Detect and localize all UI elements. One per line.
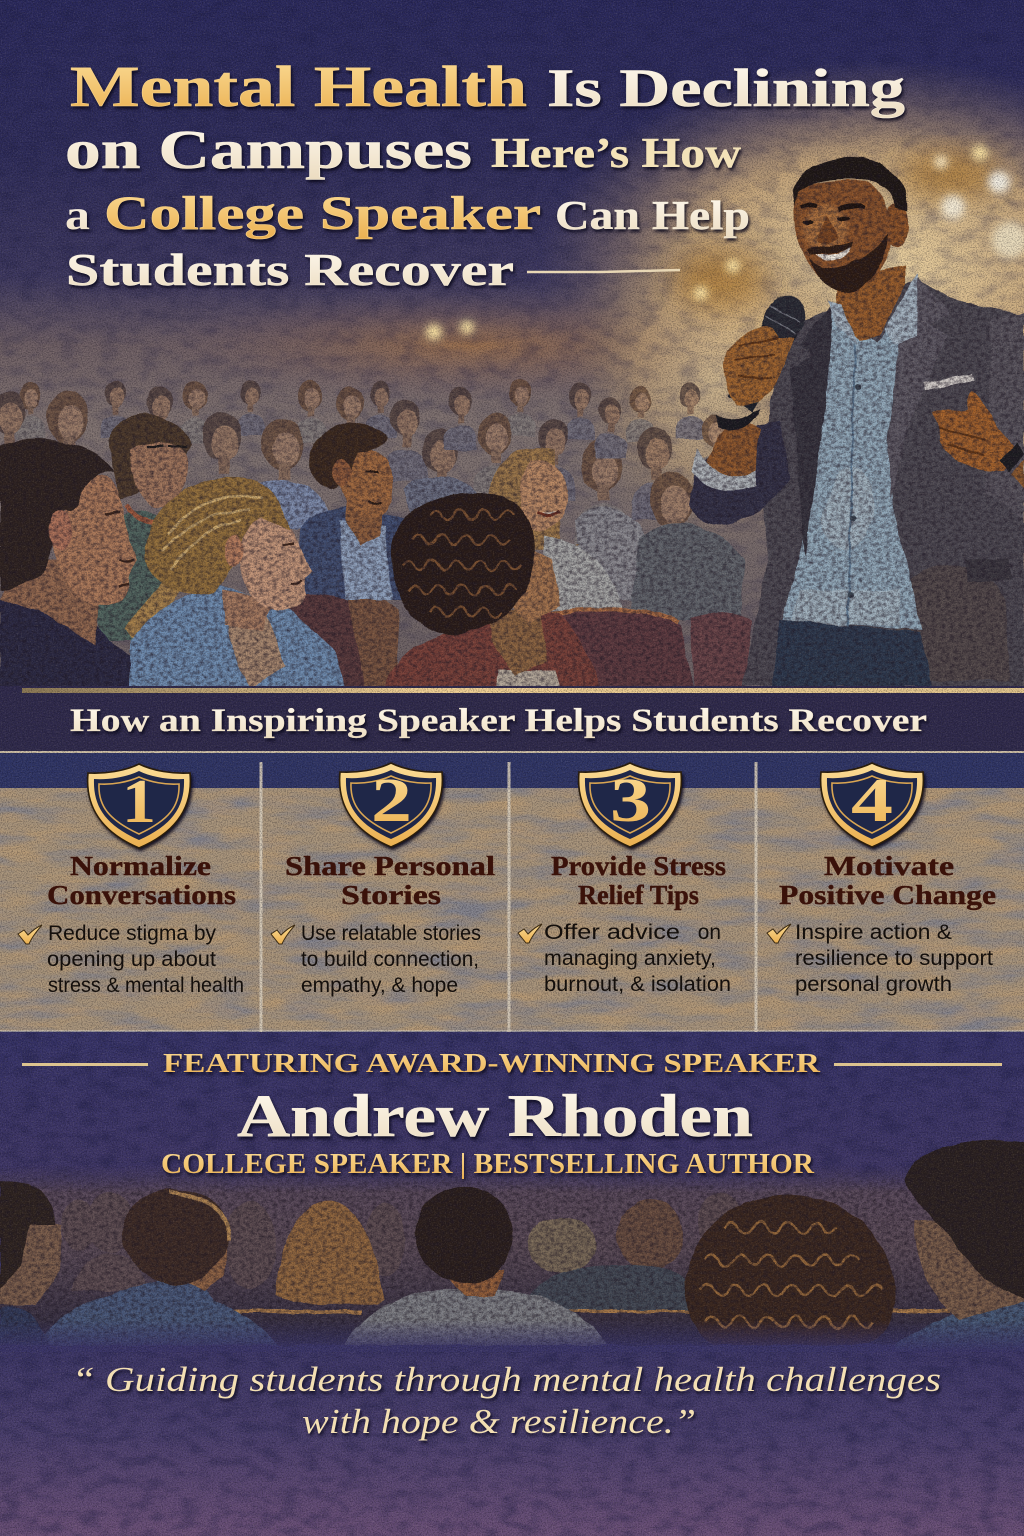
step 2 text: Use relatable stories (301, 922, 481, 945)
bottom audience: fade to foreground (0, 1320, 1024, 1352)
step 1 text: Reduce stigma by (48, 922, 216, 945)
speaker: buttons (847, 383, 861, 598)
step 3 heading: Relief Tips (578, 880, 699, 910)
bottom audience: warm backdrop (0, 1165, 1024, 1345)
speaker: left lapel (790, 305, 832, 560)
speaker: face highlight (804, 204, 848, 252)
title line 3: College Speaker (104, 187, 541, 240)
step 2 badge: 2 (371, 767, 412, 835)
step 2 text: to build connection, (301, 948, 479, 971)
bottom audience: blue shirt person (35, 1280, 278, 1345)
quote: with hope & resilience.” (302, 1402, 696, 1441)
step 4 text: resilience to support (795, 947, 993, 970)
background: bottom mottling (0, 1032, 1024, 1536)
speaker (688, 157, 1024, 686)
speaker: hand holding mic (724, 326, 795, 406)
step 1 badge: 1 (122, 768, 156, 836)
speaker: microphone (728, 288, 814, 412)
step 3 text: on (692, 921, 721, 944)
title line 4: Students Recover (66, 244, 514, 295)
featuring line (22, 1048, 1002, 1078)
step 3: provide stress relief tips (518, 763, 731, 996)
featuring line: FEATURING AWARD-WINNING SPEAKER (163, 1048, 821, 1078)
step 2 badge (340, 763, 442, 847)
bottom audience: grey jackets (525, 1265, 692, 1310)
step 4 heading: Motivate (824, 851, 954, 881)
speaker: beard (808, 232, 888, 293)
bottom audience: small head (528, 1217, 596, 1273)
step 1 heading: Conversations (47, 880, 236, 910)
audience: back row shirts (245, 476, 745, 620)
speaker: jacket (742, 280, 1024, 686)
title line 2 (65, 119, 742, 180)
step 2 check (271, 925, 295, 944)
step 4: motivate positive change (767, 763, 996, 996)
speaker name: Andrew Rhoden (237, 1083, 753, 1149)
speaker: teeth (815, 247, 851, 261)
bottom audience: left man (0, 1181, 62, 1345)
title line 3: Can Help (555, 192, 750, 238)
bottom audience: curly hair (685, 1195, 895, 1345)
bottom audience: right man (895, 1140, 1024, 1350)
step 4 text: personal growth (795, 973, 952, 996)
heading: how an inspiring speaker: How an Inspiring Speaker Helps Students Recover (70, 703, 927, 739)
speaker: shirt shading (790, 467, 900, 625)
step 2: share personal stories (271, 763, 496, 997)
speaker: jeans (772, 620, 932, 686)
speaker: collar (828, 272, 918, 345)
speaker: eyes and brows (800, 202, 866, 224)
speaker: right sleeve shade (985, 312, 1024, 520)
title rule (527, 270, 680, 272)
speaker: neck (835, 265, 905, 342)
speaker: left sleeve (688, 420, 790, 525)
step 2 heading: Share Personal (285, 851, 496, 881)
background: bottom section (0, 1032, 1024, 1536)
step 3 heading: Provide Stress (551, 851, 726, 881)
speaker: face (793, 181, 892, 293)
background: top scene (0, 0, 1024, 690)
bottom audience: dim back heads (62, 1192, 742, 1290)
audience: woman right, hair down (490, 447, 622, 610)
audience: left foreground man (0, 439, 172, 690)
step 4 check (767, 924, 791, 943)
speaker: pocket square (922, 374, 974, 390)
bottom audience: seated woman long hair (275, 1200, 385, 1305)
speaker: shirt placket (848, 345, 855, 628)
quote (72, 1360, 941, 1441)
bottom audience: head with parted hair (122, 1189, 230, 1290)
speaker: right lapel (888, 278, 948, 500)
step 1 check (18, 925, 42, 944)
step 4 badge (821, 763, 923, 847)
step 3 badge (579, 763, 681, 847)
speaker: right forearm (1012, 460, 1024, 490)
step 3 text: Offer advice (544, 921, 680, 944)
step 1 heading: Normalize (70, 851, 211, 881)
step 4 text: Inspire action & (795, 921, 952, 944)
bottom audience: centre head (415, 1187, 512, 1296)
quote: “ Guiding students through mental health challenges (72, 1360, 941, 1399)
title line 3 (65, 187, 750, 240)
step 3 check (518, 924, 542, 943)
step 4 badge: 4 (851, 767, 893, 835)
speaker: open hand (932, 390, 1017, 471)
speaker: forearm (697, 420, 760, 488)
step 3 badge: 3 (610, 767, 651, 835)
speaker: ear (886, 203, 908, 247)
audience: woman with glasses (92, 414, 190, 640)
speaker: wristband (716, 408, 760, 430)
speaker: lower pocket (965, 558, 1013, 583)
speaker titles: COLLEGE SPEAKER | BESTSELLING AUTHOR (161, 1149, 815, 1180)
stage lights (426, 145, 1024, 340)
title line 2: Here’s How (491, 131, 742, 177)
step 4 heading: Positive Change (779, 880, 996, 910)
step 2 text: empathy, & hope (301, 974, 458, 997)
bottom audience: rail highlight (215, 1309, 950, 1313)
title line 1: Mental Health (70, 54, 527, 119)
audience: center man in jacket (296, 423, 415, 600)
bottom audience (0, 1140, 1024, 1350)
speaker: jacket warm patches (890, 565, 1010, 680)
audience: curly hair woman (385, 493, 600, 690)
background: stage light glow (150, 60, 1024, 640)
speaker: nose (817, 215, 838, 244)
background: fine mottling (0, 0, 1024, 686)
title line 1: Is Declining (547, 58, 905, 118)
bottom audience: hoodie (345, 1288, 606, 1345)
title (65, 54, 905, 295)
seats (268, 594, 752, 690)
step 1 badge (88, 764, 190, 848)
speaker: wristwatch (1000, 442, 1024, 472)
speaker: hair (793, 157, 907, 212)
step 1 text: stress & mental health (48, 974, 244, 997)
panel: banner header (0, 686, 1024, 754)
speaker: shirt (783, 280, 922, 630)
audience: blonde woman (124, 477, 345, 690)
step 3 text: managing anxiety, (544, 947, 716, 970)
audience (0, 379, 752, 690)
speaker: mustache (807, 242, 853, 254)
title line 3: a (65, 193, 90, 239)
step 2 heading: Stories (341, 880, 441, 910)
speaker: shirt cuff (692, 448, 757, 490)
bottom audience: head facing away (617, 1199, 683, 1271)
audience: far crowd rows (0, 379, 733, 585)
title line 2: on Campuses (65, 119, 472, 180)
step 3 text: burnout, & isolation (544, 973, 731, 996)
step 1: normalize conversations (18, 764, 244, 997)
panel: four steps band (0, 753, 1024, 1033)
title line 1 (70, 54, 905, 119)
step 1 text: opening up about (47, 948, 216, 971)
